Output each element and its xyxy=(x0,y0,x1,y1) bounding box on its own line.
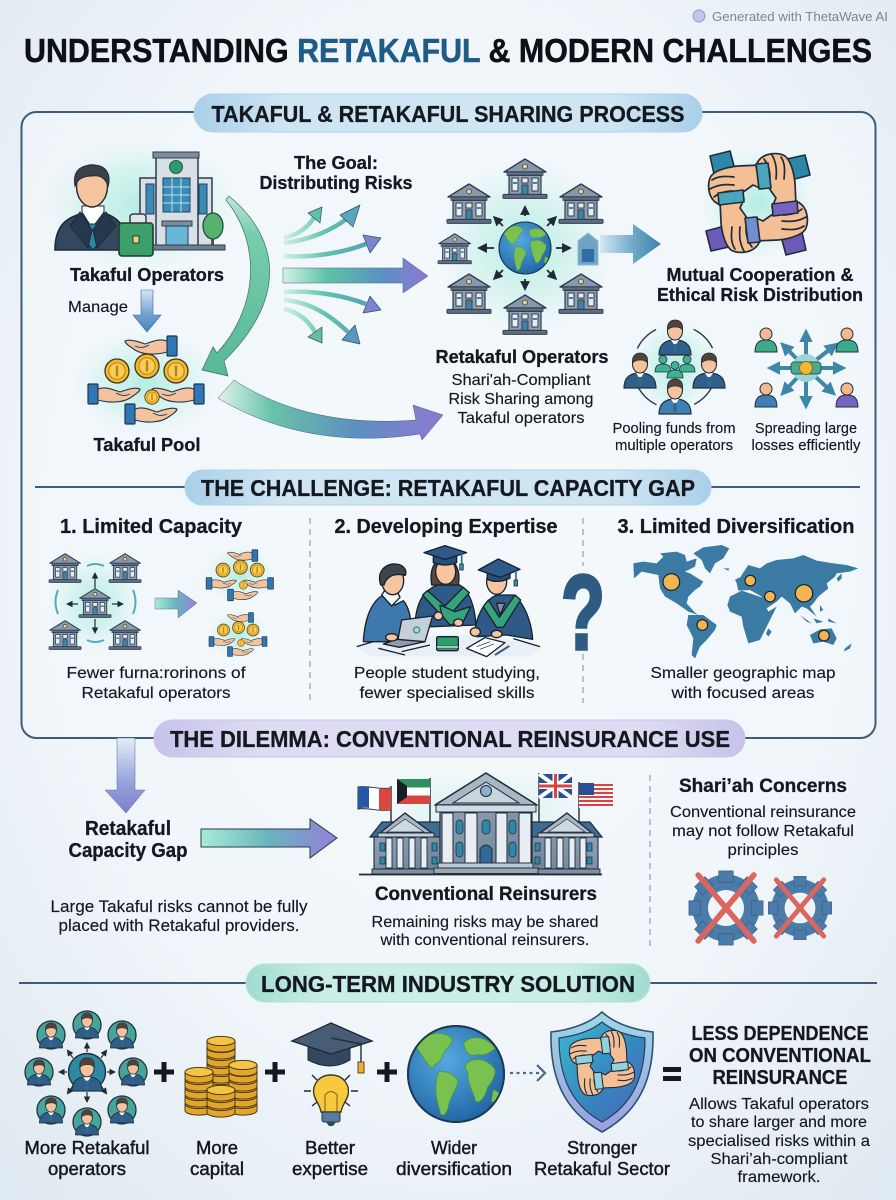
description: People student studying, xyxy=(354,665,540,682)
icon: clasped hands xyxy=(702,147,814,259)
icon: small pool 1 xyxy=(205,546,275,604)
text: the goal: Distributing Risks xyxy=(260,173,412,193)
plus sign xyxy=(265,1062,285,1082)
label: wider diversification: Wider xyxy=(431,1138,477,1158)
text: large risks: placed with Retakaful providers. xyxy=(58,917,300,935)
banner: solution xyxy=(246,964,650,1002)
text: shariah concerns: Shari’ah Concerns xyxy=(679,775,847,797)
icon: globe xyxy=(408,1026,504,1122)
text: retakaful operators: Shari'ah-Compliant xyxy=(452,372,591,389)
label: takaful operators: Takaful Operators xyxy=(70,265,224,285)
text: capacity gap: Capacity Gap xyxy=(68,840,188,862)
watermark: Generated with ThetaWave AI xyxy=(712,10,888,24)
icon: students studying xyxy=(357,546,542,657)
text: shariah concerns xyxy=(670,775,856,859)
text: mutual cooperation: Ethical Risk Distribution xyxy=(657,284,863,305)
banner: challenge xyxy=(185,470,711,505)
column: developing expertise xyxy=(334,516,558,702)
text: capacity gap xyxy=(68,818,188,862)
arrow: down to capacity gap xyxy=(105,738,145,813)
icon: spreading losses xyxy=(755,328,858,407)
banner: dilemma xyxy=(154,720,745,757)
description: with focused areas xyxy=(670,685,814,702)
description xyxy=(66,665,246,702)
text: mutual cooperation: Mutual Cooperation & xyxy=(666,264,854,285)
flag: France xyxy=(358,786,391,822)
column: limited diversification xyxy=(618,516,858,702)
banner: solution: LONG-TERM INDUSTRY SOLUTION xyxy=(261,971,635,997)
label: wider diversification xyxy=(396,1138,512,1179)
heading: 3. Limited Diversification xyxy=(618,516,854,538)
arrows: risk distribution fan xyxy=(283,205,428,344)
text: large risks xyxy=(50,898,308,935)
text: shariah concerns: Conventional reinsurance xyxy=(670,804,856,821)
text: capacity gap: Retakaful xyxy=(85,818,171,840)
label: stronger retakaful sector: Stronger xyxy=(567,1138,637,1158)
plus sign xyxy=(154,1062,174,1082)
label: takaful pool: Takaful Pool xyxy=(94,435,200,455)
panel: sharing process and challenge frame xyxy=(22,112,876,738)
label: stronger retakaful sector xyxy=(534,1138,670,1179)
icon: small pool 2 xyxy=(208,609,268,659)
banner: sharing process xyxy=(194,94,702,132)
description: Retakaful operators xyxy=(82,685,230,702)
text: large risks: Large Takaful risks cannot be fully xyxy=(50,898,308,916)
icon: graduation cap and light bulb xyxy=(292,1023,372,1126)
text: less dependence: Shari’ah-compliant xyxy=(710,1151,848,1168)
text: retakaful operators: Risk Sharing among xyxy=(448,391,594,408)
label: pooling funds xyxy=(612,421,736,454)
title: UNDERSTANDING RETAKAFUL & MODERN CHALLENGES xyxy=(24,32,872,69)
description xyxy=(354,665,540,702)
label: manage: Manage xyxy=(68,299,128,316)
label: more capital: capital xyxy=(190,1159,244,1179)
label: pooling funds: multiple operators xyxy=(615,438,733,454)
text: conventional reinsurers xyxy=(372,884,598,949)
description xyxy=(650,665,836,702)
text: shariah concerns: principles xyxy=(728,842,798,859)
icon: question mark: ? xyxy=(561,554,605,672)
arrow: manage down xyxy=(133,290,161,332)
text: conventional reinsurers: Remaining risks may be shared xyxy=(372,914,598,931)
banner: dilemma: THE DILEMMA: CONVENTIONAL REINSURANCE USE xyxy=(170,726,730,752)
banner: sharing process: TAKAFUL & RETAKAFUL SHARING PROCESS xyxy=(212,101,684,127)
icon: retakaful network xyxy=(437,159,613,336)
label: better expertise xyxy=(292,1138,368,1179)
text: the goal: The Goal: xyxy=(294,153,378,173)
text: less dependence xyxy=(688,1022,871,1186)
text: retakaful operators: Takaful operators xyxy=(458,410,584,427)
icon: small banks network xyxy=(49,553,141,653)
icon: conventional reinsurers building with flags xyxy=(358,770,613,874)
icon: crossed gears xyxy=(689,871,832,945)
label: more retakaful operators: operators xyxy=(48,1159,126,1179)
label: wider diversification: diversification xyxy=(396,1159,512,1179)
arrow: curved to pool xyxy=(202,196,270,376)
column: limited capacity xyxy=(49,516,275,702)
text: shariah concerns: may not follow Retakaful xyxy=(672,823,854,840)
label: more retakaful operators xyxy=(24,1138,150,1179)
heading: 2. Developing Expertise xyxy=(334,516,558,538)
plus sign xyxy=(377,1062,397,1082)
text: mutual cooperation xyxy=(657,264,863,305)
icon: takaful operators xyxy=(45,140,235,270)
text: less dependence: REINSURANCE xyxy=(712,1066,848,1089)
label: spreading losses: losses efficiently xyxy=(752,438,861,454)
description: fewer specialised skills xyxy=(360,685,534,702)
heading: 1. Limited Capacity xyxy=(60,516,243,538)
label: more capital xyxy=(190,1138,244,1179)
label: better expertise: expertise xyxy=(292,1159,368,1179)
map: world xyxy=(633,545,858,658)
label: more capital: More xyxy=(196,1138,238,1158)
icon: coin stacks xyxy=(185,1036,257,1117)
text: less dependence: ON CONVENTIONAL xyxy=(689,1044,871,1067)
description: Smaller geographic map xyxy=(650,665,836,682)
description: Fewer furna:rorinons of xyxy=(66,665,246,682)
icon: takaful pool xyxy=(74,331,218,435)
icon: more retakaful operators network xyxy=(25,1011,147,1136)
text: retakaful operators: Retakaful Operators xyxy=(436,347,608,367)
banner: challenge: THE CHALLENGE: RETAKAFUL CAPACITY GAP xyxy=(201,475,695,501)
equals sign xyxy=(663,1070,681,1078)
text: retakaful operators xyxy=(436,347,608,427)
label: pooling funds: Pooling funds from xyxy=(612,421,736,437)
label: more retakaful operators: More Retakaful xyxy=(24,1138,150,1158)
icon: shield with clasped hands xyxy=(551,1012,653,1132)
text: conventional reinsurers: with conventional reinsurers. xyxy=(379,932,590,949)
text: conventional reinsurers: Conventional Reinsurers xyxy=(375,884,597,905)
label: stronger retakaful sector: Retakaful Sector xyxy=(534,1159,670,1179)
arrow: curved to retakaful operators xyxy=(218,380,443,440)
icon: pooling funds xyxy=(624,320,725,414)
arrow: capacity xyxy=(155,590,197,618)
arrow: to mutual cooperation xyxy=(600,224,661,264)
text: the goal xyxy=(260,153,412,193)
flag: Kuwait xyxy=(397,778,430,822)
label: spreading losses: Spreading large xyxy=(755,421,857,437)
text: less dependence: framework. xyxy=(738,1169,820,1186)
flag: United Kingdom xyxy=(539,773,572,822)
arrow: to conventional reinsurers xyxy=(201,819,337,858)
label: spreading losses xyxy=(752,421,861,454)
text: less dependence: to share larger and more xyxy=(691,1114,867,1131)
text: less dependence: specialised risks within a xyxy=(688,1133,870,1150)
text: less dependence: Allows Takaful operators xyxy=(689,1096,869,1113)
label: better expertise: Better xyxy=(305,1138,355,1158)
flag: United States xyxy=(579,782,613,822)
text: less dependence: LESS DEPENDENCE xyxy=(692,1022,868,1045)
arrow: dotted to shield xyxy=(510,1065,545,1081)
